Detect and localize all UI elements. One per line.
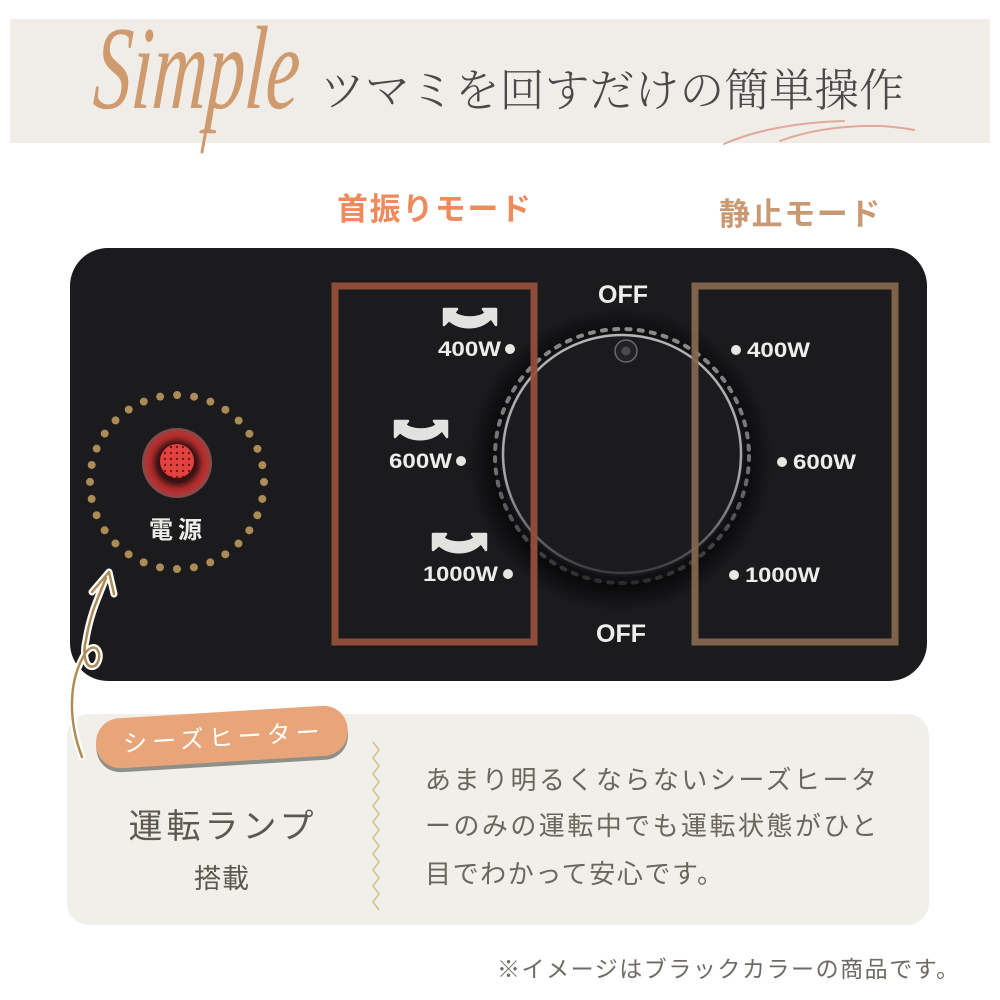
icon: power lamp bbox=[142, 428, 212, 498]
swing 1000W dot bbox=[503, 569, 513, 579]
description text: ーのみの運転中でも運転状態がひと bbox=[425, 806, 877, 843]
header band bbox=[10, 19, 990, 143]
label: static mode: 静止モード bbox=[719, 189, 882, 234]
description text: 目でわかって安心です。 bbox=[425, 854, 723, 891]
arrow from lamp callout to pill bbox=[72, 572, 114, 757]
static 600W dot bbox=[777, 457, 787, 467]
subheading: equipped: 搭載 bbox=[194, 857, 250, 896]
label: OFF top: OFF bbox=[598, 281, 648, 309]
heading: running lamp: 運転ランプ bbox=[129, 799, 317, 848]
title: Japanese heading: ツマミを回すだけの簡単操作 bbox=[320, 66, 904, 116]
swing 400W label: 400W bbox=[438, 338, 501, 361]
static 1000W label: 1000W bbox=[745, 564, 820, 587]
label: power: 電源 bbox=[149, 510, 207, 545]
footnote: ※イメージはブラックカラーの商品です。 bbox=[497, 950, 959, 984]
swing 600W label: 600W bbox=[389, 450, 452, 473]
knob bbox=[468, 308, 772, 612]
pill label: シーズヒーター bbox=[122, 712, 326, 759]
pill label bbox=[95, 704, 349, 774]
frame: static mode bbox=[695, 286, 895, 642]
label: OFF bottom: OFF bbox=[596, 620, 646, 648]
description text: あまり明るくならないシーズヒータ bbox=[425, 760, 877, 797]
panel: black heater control plate bbox=[70, 248, 927, 681]
wavy divider bbox=[373, 742, 379, 910]
description text bbox=[425, 760, 877, 891]
static settings bbox=[729, 339, 856, 587]
lower info panel bbox=[67, 714, 929, 925]
swing 400W dot bbox=[505, 344, 515, 354]
swing 1000W label: 1000W bbox=[423, 563, 498, 586]
dotted ring around lamp bbox=[90, 395, 264, 569]
swing 600W dot bbox=[456, 456, 466, 466]
swing 400W icon bbox=[444, 309, 496, 327]
static 400W dot bbox=[731, 345, 741, 355]
static 1000W dot bbox=[729, 570, 739, 580]
swing 1000W icon bbox=[433, 534, 486, 552]
swing 600W icon bbox=[395, 421, 447, 439]
static 400W label: 400W bbox=[747, 339, 810, 362]
static 600W label: 600W bbox=[793, 451, 856, 474]
decorative underline strokes bbox=[724, 121, 914, 144]
label: swing mode: 首振りモード bbox=[337, 184, 533, 229]
title: Simple script word: Simple bbox=[90, 2, 305, 134]
swing settings bbox=[389, 309, 515, 586]
frame: swing mode bbox=[335, 286, 534, 642]
